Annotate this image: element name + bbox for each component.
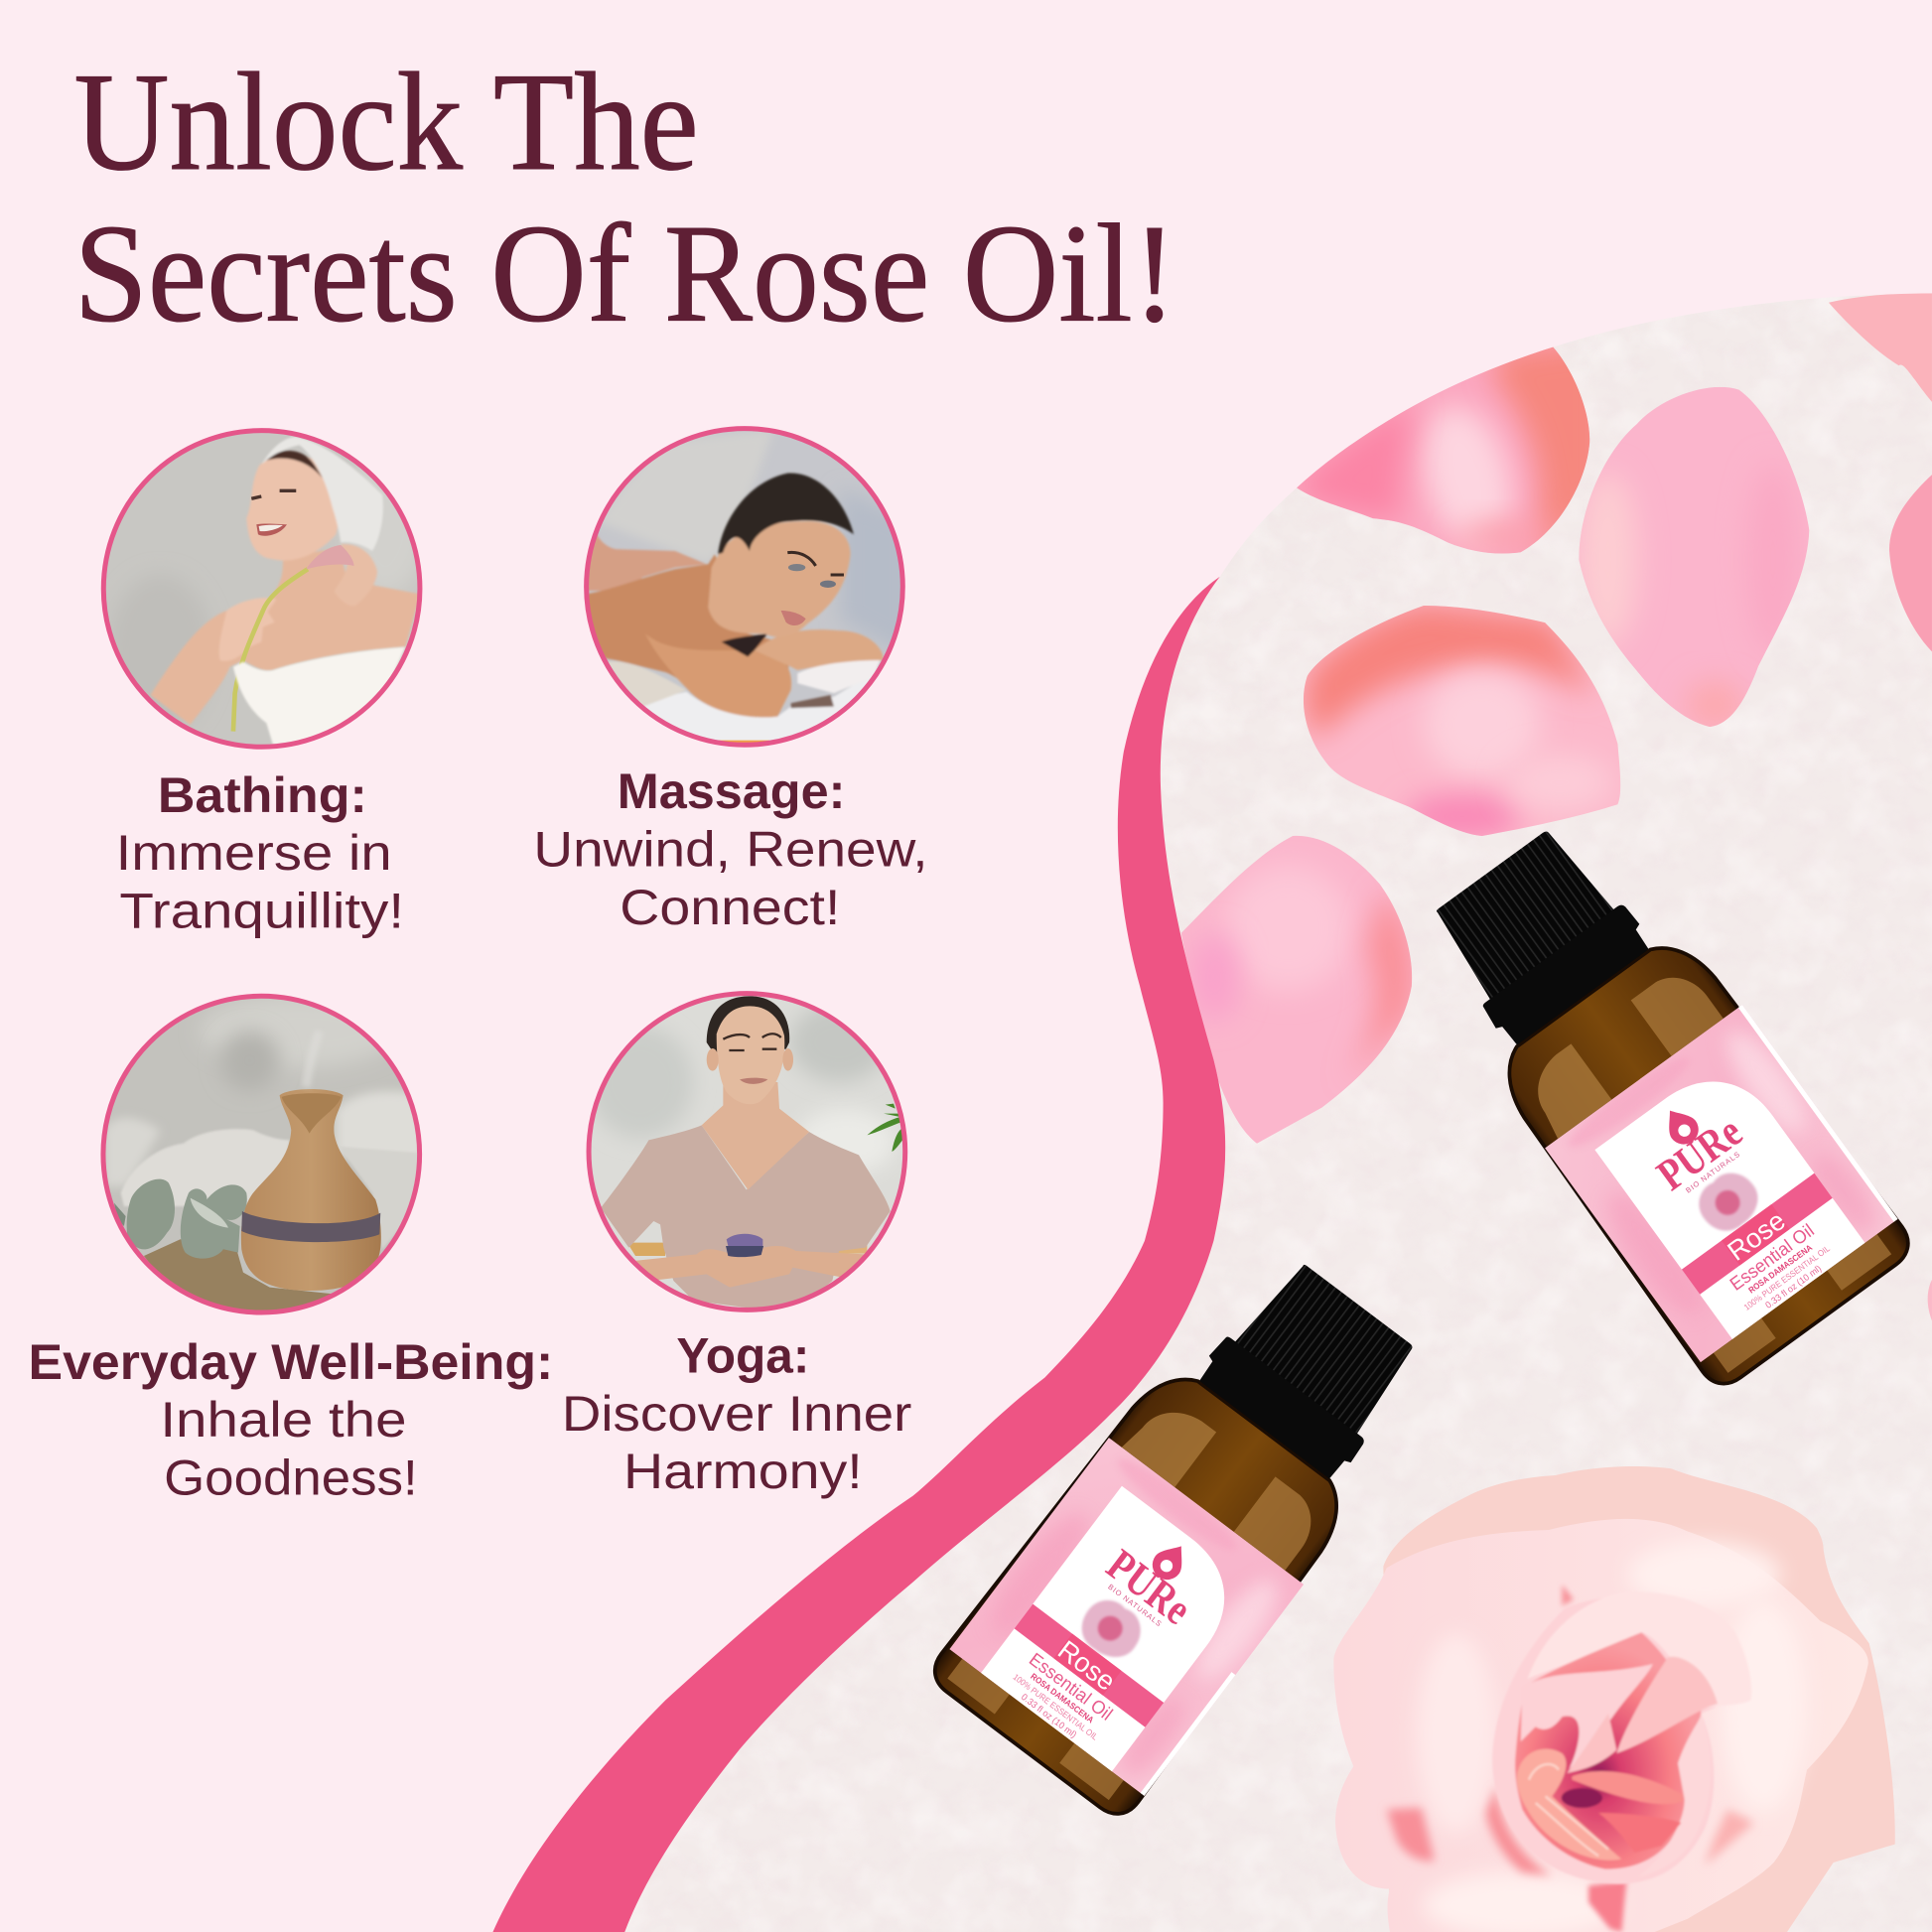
hair	[707, 996, 789, 1052]
rolled towel	[608, 661, 687, 707]
bottle label: 100% PURE ESSENTIAL OIL	[1012, 1672, 1100, 1742]
photo circle: everyday well-being	[94, 988, 432, 1325]
hands	[633, 1246, 866, 1288]
white label panel	[981, 1485, 1225, 1771]
rose: outer peach petals	[1383, 1466, 1895, 1932]
logo: BIO NATURALS: BIO NATURALS	[1106, 1583, 1164, 1629]
label text: Rose	[1722, 1204, 1791, 1267]
caption: everyday well-being	[29, 1334, 553, 1505]
logo: drop	[1669, 1110, 1699, 1145]
plant	[867, 1104, 902, 1152]
bottle label: Essential Oil	[1026, 1648, 1117, 1725]
petals group	[1176, 293, 1932, 1321]
pink wave band	[492, 577, 1225, 1932]
caption: bathing	[116, 767, 404, 939]
caption: bathing: Tranquillity!	[119, 884, 404, 939]
title: Unlock The	[73, 44, 699, 200]
title	[73, 44, 1176, 351]
caption: yoga	[562, 1328, 911, 1499]
caption: everyday well-being: Everyday Well-Being:	[29, 1334, 553, 1390]
caption: yoga: Harmony!	[623, 1444, 863, 1499]
bottle label	[1545, 1005, 1898, 1362]
face	[246, 454, 338, 561]
sheet	[635, 667, 884, 748]
raised hand	[335, 544, 377, 606]
panel: plaster surface with petals, bottles and rose	[617, 283, 1932, 1932]
bottle label: ROSA DAMASCENA	[1746, 1242, 1815, 1296]
bench	[627, 1243, 665, 1256]
logo: PURE wordmark: PURe	[1098, 1540, 1200, 1634]
bottle: upper right	[1437, 832, 1910, 1386]
bottle label: ROSA DAMASCENA	[1029, 1671, 1096, 1725]
rose: heart	[1492, 1592, 1751, 1884]
hair	[265, 451, 323, 479]
cap	[1419, 818, 1655, 1049]
chin shadow	[722, 633, 767, 657]
petal: small right edge	[1928, 1280, 1932, 1321]
bottle: lower centre	[933, 1265, 1412, 1816]
label text: Rose	[1052, 1634, 1122, 1697]
flower stem	[233, 569, 308, 732]
caption: yoga: Discover Inner	[562, 1386, 911, 1442]
caption: bathing: Immerse in	[116, 825, 392, 881]
crystal	[727, 1234, 762, 1246]
diffuser	[241, 1089, 381, 1291]
label flower	[1698, 1172, 1759, 1232]
eucalyptus leaves	[114, 1179, 247, 1259]
caption: massage: Massage:	[618, 763, 845, 819]
photo circle: massage	[576, 422, 913, 759]
rose bar	[1682, 1173, 1833, 1295]
lower hand	[219, 598, 276, 661]
features	[256, 524, 287, 536]
rose: main pale petals	[1333, 1519, 1868, 1932]
caption: massage	[533, 763, 928, 935]
near arm	[645, 633, 791, 717]
petal: centre	[1298, 599, 1627, 841]
flower bud	[306, 545, 354, 569]
petal: lower left	[1176, 831, 1419, 1152]
petal: top right corner	[1829, 293, 1932, 402]
features	[787, 552, 844, 575]
sweater	[601, 1125, 891, 1309]
caption: massage: Unwind, Renew,	[533, 821, 928, 877]
label flower	[1072, 1590, 1151, 1668]
folded towels	[797, 660, 881, 693]
bottle label: 0.33 fl oz (10 ml)	[1020, 1692, 1078, 1739]
neck and chest	[702, 1082, 809, 1189]
petal: right edge	[1889, 475, 1932, 651]
bottle label	[949, 1438, 1304, 1796]
skin: arm and torso	[151, 548, 420, 725]
caption: massage: Connect!	[620, 880, 840, 935]
cap	[1193, 1252, 1430, 1483]
caption: yoga: Yoga:	[676, 1328, 809, 1384]
title: Secrets Of Rose Oil!	[73, 196, 1176, 351]
bottle label: 0.33 fl oz (10 ml)	[1763, 1263, 1823, 1311]
forearm	[755, 629, 884, 670]
rose flower	[1333, 1466, 1895, 1932]
hair	[718, 474, 854, 554]
logo: drop	[1152, 1546, 1181, 1581]
petal: right large	[1574, 380, 1812, 730]
caption: bathing: Bathing:	[158, 767, 367, 823]
bottle label: 100% PURE ESSENTIAL OIL	[1742, 1243, 1832, 1312]
face	[708, 521, 851, 637]
white wrap	[233, 647, 405, 745]
caption: everyday well-being: Goodness!	[164, 1449, 418, 1505]
petal: top	[1297, 347, 1590, 554]
logo: PURE wordmark: PURe	[1648, 1106, 1750, 1200]
logo: BIO NATURALS: BIO NATURALS	[1684, 1150, 1742, 1195]
therapist arm and hand	[586, 531, 707, 591]
woven mat	[144, 1239, 333, 1315]
torso	[586, 554, 791, 717]
rose bar	[1015, 1604, 1164, 1727]
photo circle: bathing	[94, 422, 432, 759]
knit blanket	[121, 1129, 290, 1206]
bottle label: Essential Oil	[1725, 1219, 1818, 1295]
towel wrap	[261, 437, 383, 551]
white label panel	[1594, 1053, 1865, 1339]
caption: everyday well-being: Inhale the	[160, 1392, 407, 1448]
photo circle: yoga	[581, 983, 918, 1320]
eyes and mouth	[723, 1034, 781, 1050]
face	[717, 1006, 784, 1104]
